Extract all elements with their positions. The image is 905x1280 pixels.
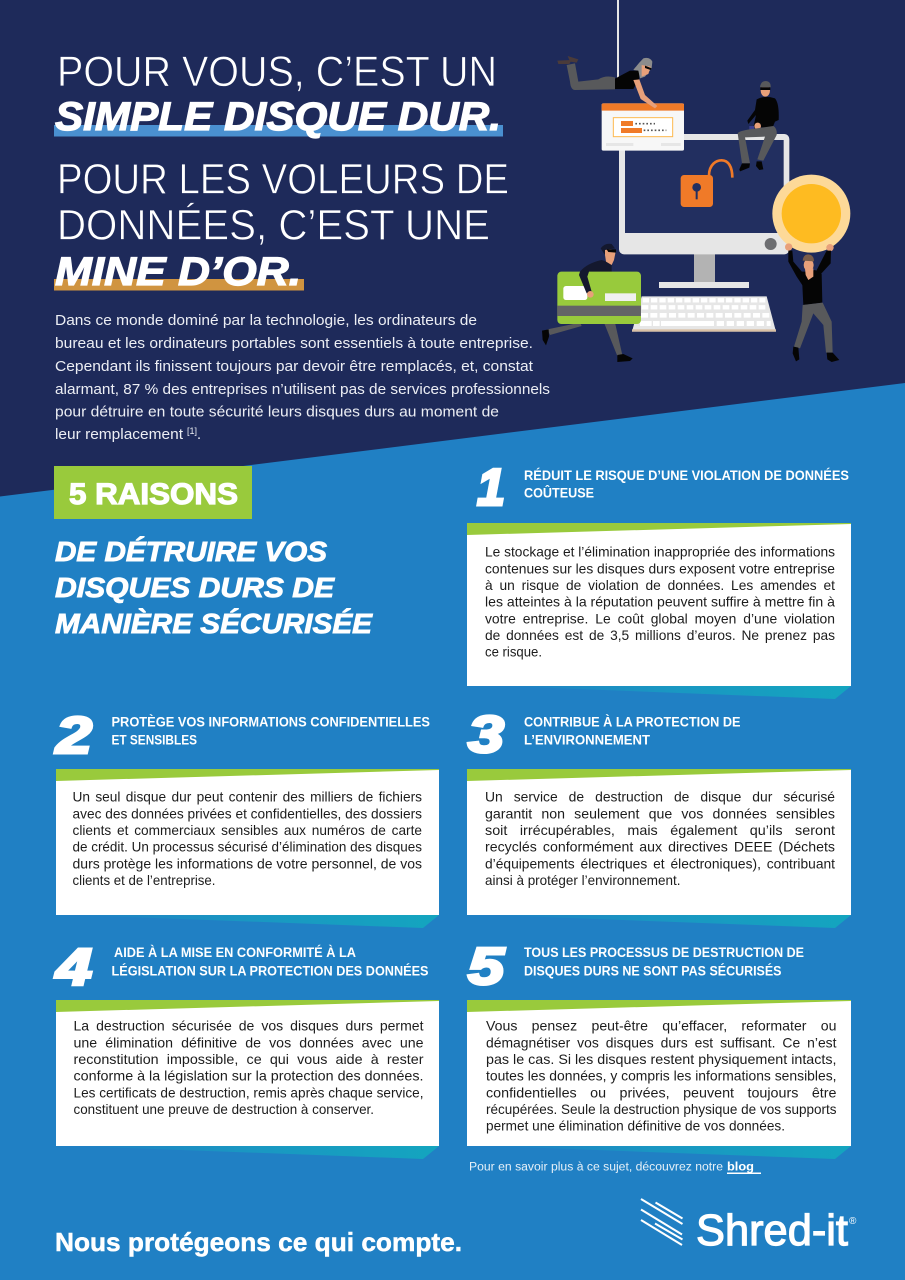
card 4 (56, 1000, 439, 1159)
intro paragraph: Cependant ils finissent toujours par devoir être remplacés, et, constat (55, 359, 533, 375)
card 5: démagnétiser vos disques durs est suffisant. Ce n’est (486, 1035, 837, 1050)
card 1: les atteintes à la réputation peuvent suffire à mettre fin à (485, 595, 835, 610)
heading 5: TOUS LES PROCESSUS DE DESTRUCTION DE (524, 945, 804, 961)
tagline: Nous protégeons ce qui compte. (55, 1227, 462, 1257)
intro paragraph (55, 313, 550, 443)
heading 2: PROTÈGE VOS INFORMATIONS CONFIDENTIELLES (112, 714, 430, 731)
intro paragraph: . (197, 427, 201, 443)
title: POUR VOUS, C’EST UN (57, 48, 497, 96)
intro paragraph: bureau et les ordinateurs portables sont essentiels à toute entreprise. (55, 336, 533, 352)
reason 5 (467, 938, 851, 1159)
5 raisons badge (54, 466, 252, 519)
title: POUR LES VOLEURS DE (57, 156, 509, 204)
card 5: permet une élimination définitive de vos données. (486, 1119, 785, 1134)
rope (617, 0, 619, 88)
Shred-it logo (641, 1199, 857, 1255)
card 5: toutes les données, y compris les informations sensibles, (486, 1069, 836, 1084)
card 4: Les certificats de destruction, remis après chaque service, (74, 1085, 423, 1100)
card 4: reconstitution impossible, ce qui vous aide à rester (74, 1052, 424, 1067)
heading 4: AIDE À LA MISE EN CONFORMITÉ À LA (114, 944, 356, 961)
card 3: garantit non seulement que vos données sensibles (485, 806, 835, 821)
card 1: ce risque. (485, 645, 542, 660)
icon: open padlock (681, 160, 732, 207)
card 3: d’équipements électriques et électroniques), contribuant (485, 856, 835, 871)
heading 2 (112, 714, 430, 748)
card 1: votre entreprise. Le coût global moyen d’une violation (485, 611, 835, 626)
card 5: pas le cas. Si les disques restent physiquement intacts, (486, 1052, 836, 1067)
subtitle: DE DÉTRUIRE VOS (55, 536, 327, 567)
card 4: constituent une preuve de destruction à conserver. (74, 1102, 374, 1117)
heading 5: DISQUES DURS NE SONT PAS SÉCURISÉS (524, 963, 782, 980)
card 2: avec des données privées et confidentielles, des dossiers (72, 806, 422, 821)
title: DONNÉES, C’EST UNE (57, 202, 490, 250)
card 1: de données est de 3,5 millions d’euros. Ne prenez pas (485, 628, 835, 643)
intro paragraph: leur remplacement (55, 427, 183, 443)
card 4: conforme à la législation sur la protection des données. (74, 1069, 424, 1084)
heading 4: LÉGISLATION SUR LA PROTECTION DES DONNÉES (112, 963, 428, 980)
card 1: contenues sur les disques durs exposent votre entreprise (485, 561, 835, 576)
card 2: clients et commerciaux sensibles aux numéros de carte (72, 823, 422, 838)
reason 3 (467, 706, 851, 928)
monitor (619, 134, 789, 288)
card 3: Un service de destruction de disque dur sécurisé (485, 790, 835, 805)
blog link note: blog (727, 1162, 754, 1174)
reason 4 (55, 939, 439, 1159)
heading 2: ET SENSIBLES (112, 732, 197, 748)
figure: hacker lifting coin (785, 243, 839, 362)
blue diagonal background (0, 383, 905, 1280)
logo stripes (641, 1199, 682, 1245)
intro paragraph: [1] (187, 426, 197, 436)
number 4: 4 (55, 939, 92, 997)
navy header background (0, 0, 905, 500)
title: MINE D’OR. (55, 250, 301, 294)
card 1: à un risque de violation de données. Les amendes et (485, 578, 835, 593)
logo wordmark: Shred-it (696, 1206, 848, 1255)
intro paragraph: alarmant, 87 % des entreprises n’utilisent pas de services professionnels (55, 382, 550, 398)
heading 1: RÉDUIT LE RISQUE D’UNE VIOLATION DE DONNÉES (524, 467, 849, 484)
card 1: Le stockage et l’élimination inappropriée des informations (485, 545, 835, 560)
heading 3 (524, 714, 740, 748)
intro paragraph: Dans ce monde dominé par la technologie, les ordinateurs de (55, 313, 477, 329)
card 5: confidentielles ou privées, peuvent toujours être (486, 1085, 836, 1100)
number 5: 5 (468, 938, 505, 996)
gold coin (772, 175, 850, 253)
card 5: Vous pensez peut-être qu’effacer, reformater ou (486, 1019, 836, 1034)
number 3: 3 (468, 706, 504, 764)
title (54, 48, 509, 294)
blog link note: Pour en savoir plus à ce sujet, découvrez notre (469, 1162, 723, 1174)
card 3: recyclés conformément aux directives DEEE (Déchets (485, 840, 835, 855)
login window (602, 103, 684, 151)
card 4: une élimination définitive de vos données avec une (74, 1035, 424, 1050)
keyboard (632, 296, 776, 332)
card 3: ainsi à protéger l’environnement. (485, 873, 680, 888)
heading 1 (524, 467, 849, 502)
subtitle: DISQUES DURS DE (55, 572, 335, 603)
heading 3: L’ENVIRONNEMENT (524, 732, 650, 748)
figure: hacker hanging from rope (557, 56, 657, 108)
heading 1: COÛTEUSE (524, 484, 594, 502)
card 2 (56, 769, 439, 928)
subtitle: MANIÈRE SÉCURISÉE (55, 608, 373, 639)
card 2: de crédit. Un processus sécurisé d’élimination des disques (72, 840, 422, 855)
heading 5 (524, 945, 804, 980)
figure: hacker sitting on monitor (738, 81, 779, 171)
card 2: clients et de l’entreprise. (72, 873, 216, 888)
registered mark: ® (849, 1216, 857, 1227)
reason 2 (55, 707, 439, 928)
heading 4 (112, 944, 428, 980)
card 3: soit irrécupérables, mais également qu’ils seront (485, 823, 835, 838)
number 1: 1 (477, 459, 505, 517)
card 5 (467, 1000, 851, 1159)
reason 1 (467, 459, 851, 699)
title: SIMPLE DISQUE DUR. (55, 95, 501, 139)
card 4: La destruction sécurisée de vos disques durs permet (74, 1019, 424, 1034)
heading 3: CONTRIBUE À LA PROTECTION DE (524, 714, 740, 731)
illustration: hackers around a computer (542, 0, 850, 362)
card 5: récupérées. Seule la destruction physique de vos supports (486, 1102, 837, 1117)
card 3 (467, 769, 851, 928)
intro paragraph: pour détruire en toute sécurité leurs disques durs au moment de (55, 404, 499, 420)
card 1 (467, 523, 851, 699)
number 2: 2 (55, 707, 92, 765)
5 raisons badge: 5 RAISONS (69, 478, 238, 511)
subtitle (55, 536, 373, 639)
figure: hacker carrying credit card (542, 244, 641, 362)
card 2: durs protège les informations de votre personnel, de vos (72, 856, 422, 871)
card 2: Un seul disque dur peut contenir des milliers de fichiers (72, 790, 422, 805)
